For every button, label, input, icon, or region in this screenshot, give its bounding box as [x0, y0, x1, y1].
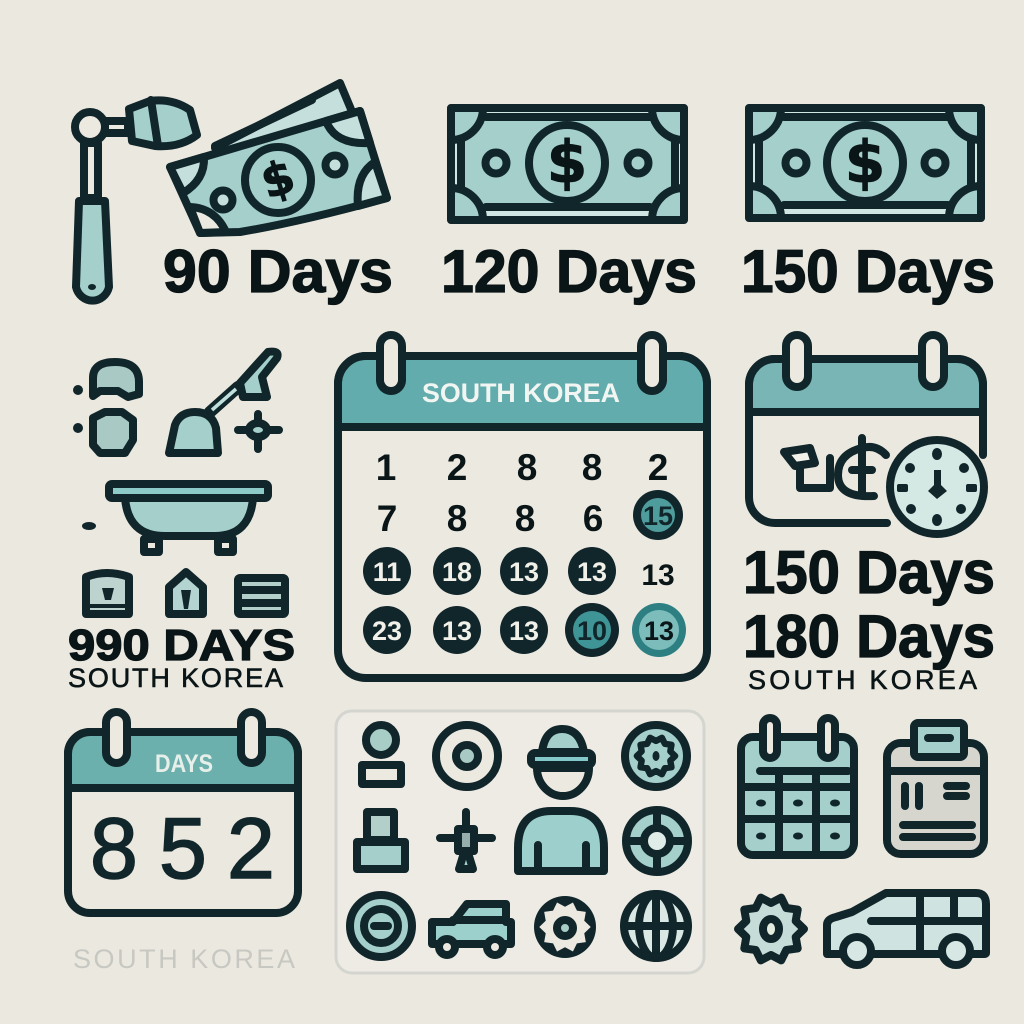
icon: globe — [624, 894, 688, 958]
highlighted dates: 15 — [643, 501, 673, 531]
highlighted dates: 18 — [442, 557, 472, 587]
calendar ring left — [786, 335, 808, 387]
icon: small gear — [738, 898, 804, 960]
dollar sign on tilted note: $ — [255, 149, 301, 210]
calendar rings — [763, 718, 835, 758]
icon: small car — [432, 904, 511, 955]
icon: list box — [238, 578, 285, 614]
highlighted dates: 13 — [442, 616, 472, 646]
dollar sign: $ — [547, 128, 587, 196]
icon: person pin — [362, 725, 401, 784]
icon: clipboard schedule — [887, 723, 984, 854]
label: 120 Days: 120 Days — [441, 238, 697, 305]
icon: cross device — [440, 812, 492, 869]
highlighted dates — [363, 490, 686, 657]
icon: wall shape — [93, 362, 139, 397]
date rows plain: 8 — [582, 447, 602, 488]
icon: person with hat — [518, 729, 604, 871]
icon: grid calendar — [741, 718, 854, 855]
icon: stacked box — [357, 812, 405, 869]
calendar title: DAYS — [155, 750, 213, 778]
date rows plain — [376, 447, 668, 539]
highlighted dates: 23 — [372, 616, 402, 646]
icon: clock — [890, 440, 984, 534]
icon: safe box — [86, 573, 129, 614]
date rows plain: 8 — [517, 447, 537, 488]
label: 150 Days: 150 Days — [741, 238, 995, 305]
icon: shower handle — [169, 352, 278, 453]
panel: icon grid — [336, 711, 704, 973]
icon: ring dial — [626, 810, 688, 872]
panel: calendar with clock — [749, 335, 984, 534]
label: 990 DAYS: 990 DAYS — [68, 621, 295, 670]
calendar title: SOUTH KOREA — [422, 378, 620, 408]
icon: small house — [169, 572, 203, 614]
icon: bathtub — [109, 484, 268, 552]
date rows plain: 1 — [376, 447, 396, 488]
label: South Korea right: SOUTH KOREA — [748, 665, 977, 695]
icon: compass ring — [436, 725, 498, 787]
icon: van — [827, 893, 986, 965]
countdown digits: 2 — [227, 801, 275, 897]
countdown digits: 5 — [159, 801, 207, 897]
highlighted dates: 10 — [577, 616, 607, 646]
calendar dots — [756, 800, 840, 840]
label: 180 Days: 180 Days — [743, 603, 995, 670]
calendar ring right — [922, 335, 944, 387]
icon: target circle — [350, 895, 412, 957]
icon: smudged ticket and dollar — [784, 438, 886, 496]
date rows plain: 2 — [648, 447, 668, 488]
label: faded South Korea: SOUTH KOREA — [73, 944, 295, 974]
label: 150 Days second: 150 Days — [743, 539, 995, 606]
icon: tilted banknotes — [170, 83, 387, 233]
date rows plain: 6 — [583, 498, 603, 539]
icon: faucet cross — [238, 414, 279, 449]
icon: banknote center — [451, 108, 684, 220]
icon: gear dial — [625, 725, 687, 787]
date rows plain: 7 — [377, 498, 397, 539]
highlighted dates: 13 — [644, 616, 674, 646]
panel: days calendar — [68, 712, 298, 913]
highlighted dates: 13 — [641, 559, 675, 592]
dollar sign: $ — [845, 128, 885, 196]
label: 90 Days: 90 Days — [163, 238, 393, 305]
calendar ring left — [106, 712, 127, 763]
icon: gear — [534, 896, 596, 958]
panel: main calendar — [338, 335, 707, 678]
highlighted dates: 13 — [509, 616, 539, 646]
highlighted dates: 11 — [373, 557, 401, 587]
countdown digits — [90, 801, 275, 897]
date rows plain: 8 — [515, 498, 535, 539]
highlighted dates: 13 — [509, 557, 539, 587]
icon: wrench tool — [75, 100, 197, 301]
calendar ring right — [641, 335, 663, 391]
calendar ring left — [380, 335, 402, 391]
highlighted dates: 13 — [577, 557, 607, 587]
panel: bathroom icons — [73, 352, 285, 614]
decorative dots — [73, 385, 96, 530]
countdown digits: 8 — [90, 801, 138, 897]
icon: round fixture — [93, 412, 133, 453]
date rows plain: 2 — [447, 447, 467, 488]
calendar ring right — [241, 712, 262, 763]
label: South Korea left: SOUTH KOREA — [68, 663, 283, 693]
date rows plain: 8 — [447, 498, 467, 539]
icon: banknote right — [749, 108, 981, 218]
